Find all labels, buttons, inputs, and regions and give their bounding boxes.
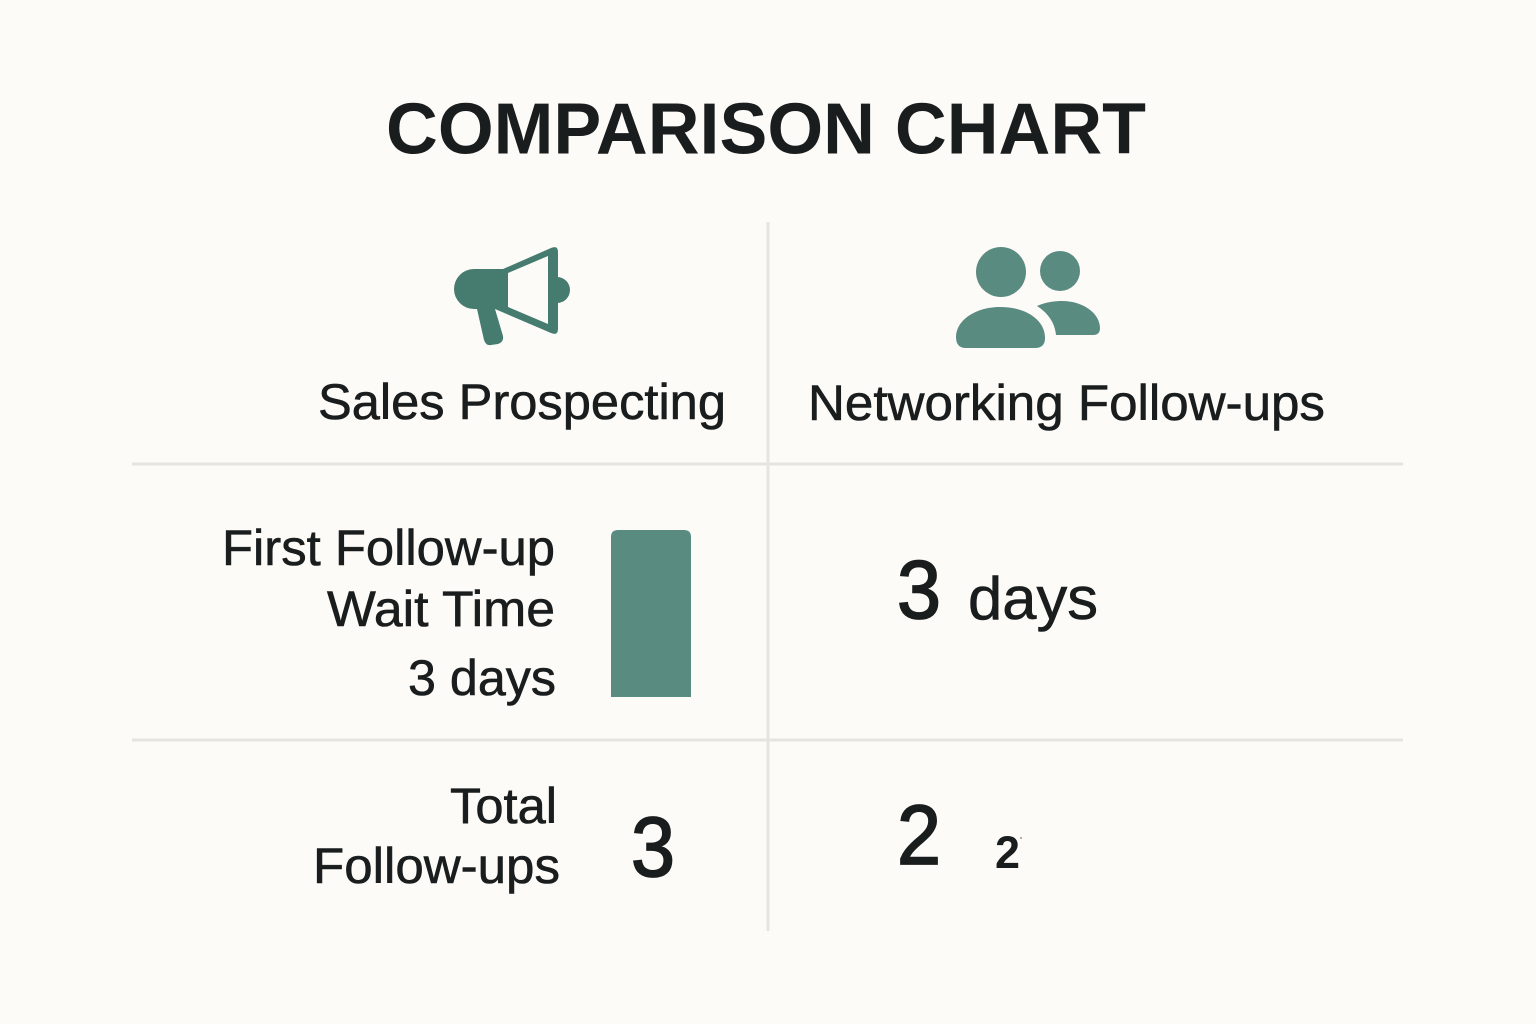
icon: megaphone xyxy=(454,247,570,345)
row label: First Follow-up Wait Time xyxy=(222,520,555,637)
column: Sales Prospecting header xyxy=(318,247,726,430)
value: networking wait 3 days xyxy=(897,543,1098,636)
column heading: Sales Prospecting: Sales Prospecting xyxy=(318,374,726,430)
row label: Total Follow-ups xyxy=(313,778,560,894)
row label: Total Follow-ups: Total xyxy=(450,778,557,834)
row label: Total Follow-ups: Follow-ups xyxy=(313,838,560,894)
value: networking total 2: 2 xyxy=(897,788,941,882)
icon: two people xyxy=(956,247,1100,348)
title: COMPARISON CHART xyxy=(386,90,1146,170)
column: Networking Follow-ups header xyxy=(808,247,1325,431)
value: networking wait 3 days: days xyxy=(968,565,1098,632)
column heading: Networking Follow-ups: Networking Follow-ups xyxy=(808,375,1325,431)
row label: First Follow-up Wait Time: First Follow-up xyxy=(222,520,555,576)
value: sales prospecting wait 3 days: 3 days xyxy=(408,650,556,706)
row label: First Follow-up Wait Time: Wait Time xyxy=(327,581,555,637)
value: sales prospecting total 3: 3 xyxy=(631,800,675,894)
bar: sales prospecting wait time xyxy=(611,530,691,697)
small mark: 2: 2 xyxy=(995,827,1020,878)
value: networking wait 3 days: 3 xyxy=(897,543,941,636)
